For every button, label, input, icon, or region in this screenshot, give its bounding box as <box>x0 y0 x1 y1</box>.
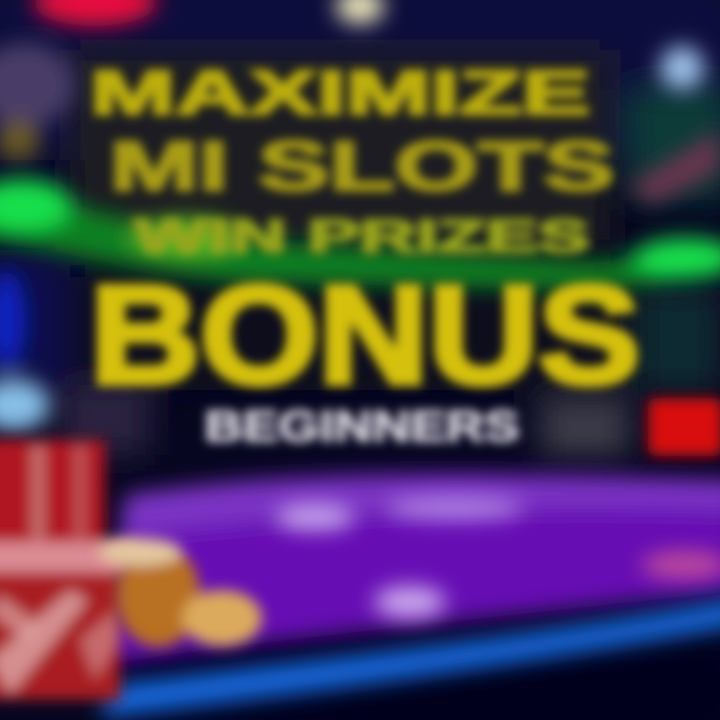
table labels <box>275 497 720 618</box>
red poker chips <box>0 440 135 700</box>
gold chips <box>98 538 262 647</box>
subtitle: BEGINNERS <box>204 402 520 451</box>
title line 1: MAXIMIZE <box>90 59 590 128</box>
title line 2: MI SLOTS <box>110 127 614 205</box>
purple table <box>100 473 720 665</box>
title line 3: WIN PRIZES <box>134 210 590 262</box>
blue table edge <box>100 598 720 718</box>
green light band <box>0 179 720 290</box>
red badge <box>648 398 720 456</box>
heading: BONUS: BONUS <box>90 256 640 413</box>
title <box>90 59 614 262</box>
